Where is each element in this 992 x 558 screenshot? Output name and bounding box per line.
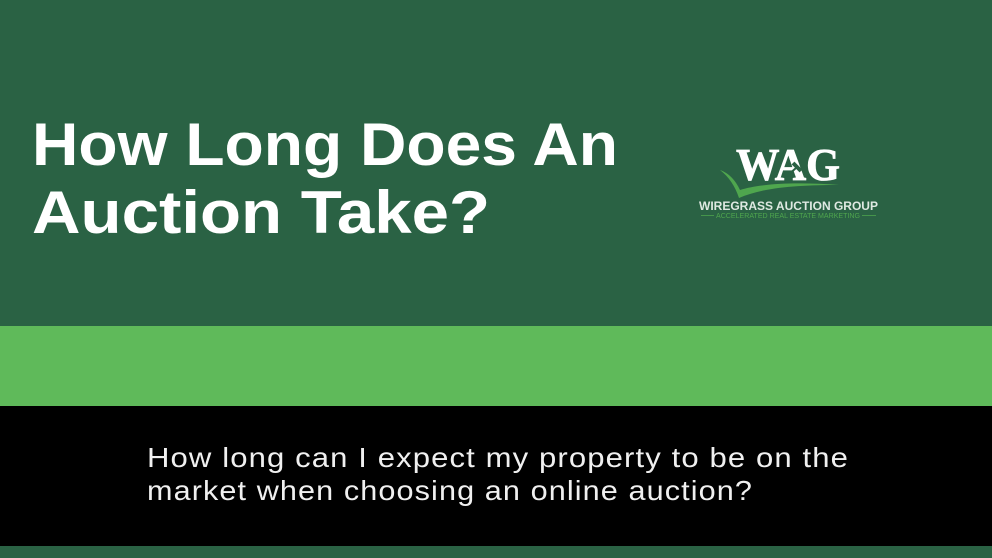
question text: How long can I expect my property to be on the [147,442,849,473]
title: How Long Does An [32,111,618,178]
panel: bottom green strip [0,546,992,558]
question text [147,442,849,506]
logo icon: gavel on the A [787,163,801,176]
logo icon: grass check swoosh [720,170,839,198]
logo: Wiregrass Auction Group [699,140,878,220]
logo tagline: ACCELERATED REAL ESTATE MARKETING [716,213,860,220]
title [32,111,618,246]
panel: top green header [0,0,992,326]
logo name: WIREGRASS AUCTION GROUP [699,201,878,213]
panel: black question band [0,406,992,546]
logo mark: WAG letters: WAG [736,140,840,190]
title: Auction Take? [32,179,490,246]
question text: market when choosing an online auction? [147,475,753,506]
panel: light green band [0,326,992,406]
